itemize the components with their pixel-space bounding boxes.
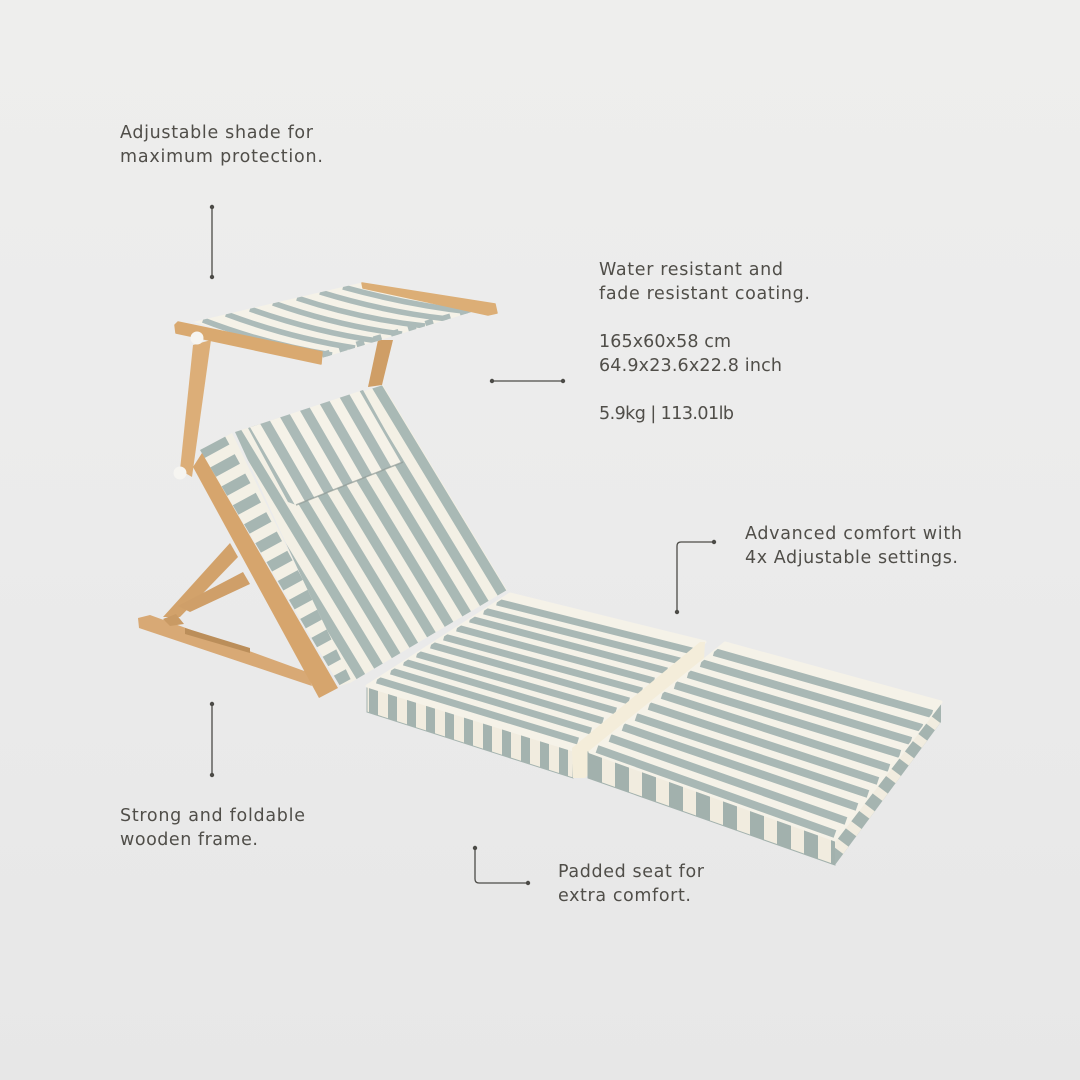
product: lounger xyxy=(138,283,941,865)
callout text: seat xyxy=(558,862,705,906)
leader: comfort xyxy=(675,540,716,614)
leader: specs xyxy=(490,379,565,383)
seat cushion 1 xyxy=(367,594,705,778)
callout text: seat: Padded seat for xyxy=(558,862,705,882)
callout text: specs: 5.9kg | 113.01lb xyxy=(599,404,734,424)
callout text: shade xyxy=(120,123,323,167)
callout text: shade: maximum protection. xyxy=(120,147,323,167)
knobs xyxy=(174,332,204,480)
callout text: shade: Adjustable shade for xyxy=(120,123,314,143)
callout text: specs: 165x60x58 cm xyxy=(599,332,731,352)
callout text: frame: wooden frame. xyxy=(120,830,258,850)
callout text: specs: fade resistant coating. xyxy=(599,284,810,304)
canopy xyxy=(175,283,497,364)
leader: seat xyxy=(473,846,530,885)
leader: shade xyxy=(210,205,214,279)
callout text: comfort: Advanced comfort with xyxy=(745,524,962,544)
leader: frame xyxy=(210,702,214,777)
wooden frame xyxy=(138,340,393,686)
back rest xyxy=(193,385,507,698)
callout text: frame xyxy=(120,806,305,850)
callout text: comfort xyxy=(745,524,962,568)
callout text: specs: 64.9x23.6x22.8 inch xyxy=(599,356,782,376)
callout text: frame: Strong and foldable xyxy=(120,806,305,826)
callout text: seat: extra comfort. xyxy=(558,886,691,906)
seat cushion 2 xyxy=(588,643,941,865)
callout text: comfort: 4x Adjustable settings. xyxy=(745,548,958,568)
pillow xyxy=(248,390,403,505)
foam divider xyxy=(572,642,705,778)
callout text: specs xyxy=(599,260,810,424)
callout text: specs: Water resistant and xyxy=(599,260,783,280)
